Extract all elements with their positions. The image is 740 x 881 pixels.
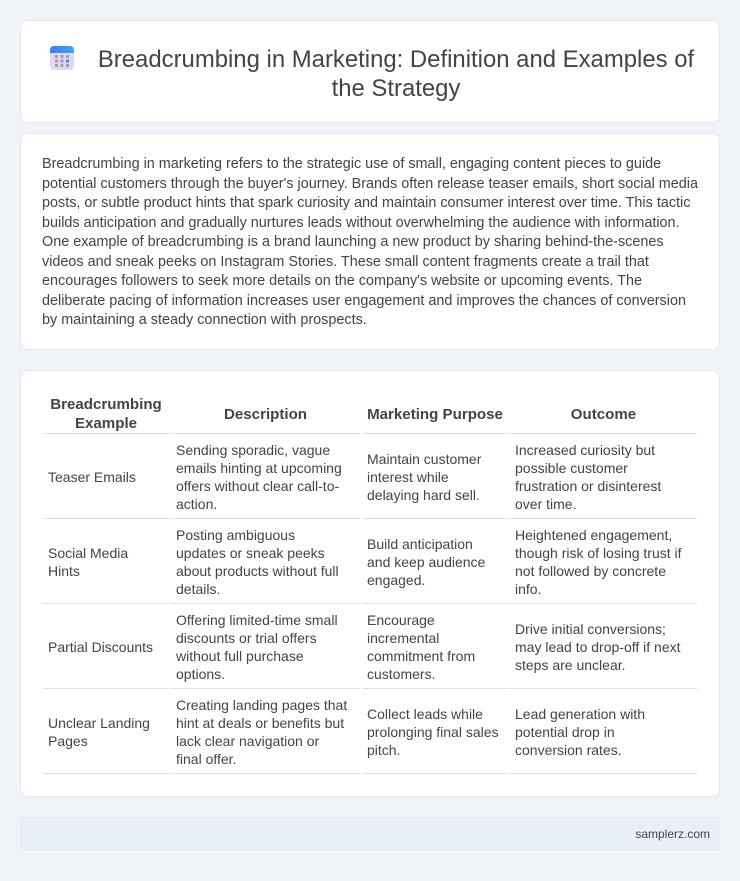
table: breadcrumbing examples: lack clear navigation or (176, 733, 319, 749)
table: breadcrumbing examples: not followed by concrete (515, 563, 666, 579)
table: breadcrumbing examples: Offering limited-time small (176, 612, 338, 628)
table: breadcrumbing examples: Marketing Purpose (367, 406, 503, 422)
panel: table card (20, 370, 720, 797)
table: breadcrumbing examples: and keep audience (367, 554, 485, 570)
table: breadcrumbing examples: incremental (367, 630, 439, 646)
table: breadcrumbing examples: Heightened engagement, (515, 527, 672, 543)
text block: introduction: deliberate pacing of information increases user engagement and improves the chances of conversion (42, 292, 686, 308)
table: breadcrumbing examples: without full purchase (176, 648, 304, 664)
table: breadcrumbing examples: Description (224, 406, 307, 422)
footer (20, 817, 720, 851)
table: breadcrumbing examples: details. (176, 581, 220, 597)
table: breadcrumbing examples: may lead to drop-off if next (515, 639, 680, 655)
table: breadcrumbing examples: offers without clear call-to- (176, 478, 339, 494)
panel: title card (20, 20, 720, 123)
text block: introduction: potential customers through the buyer's journey. Brands often release teaser emails, short social media (42, 176, 698, 192)
table: breadcrumbing examples: engaged. (367, 572, 425, 588)
table: breadcrumbing examples: commitment from (367, 648, 475, 664)
table: breadcrumbing examples: over time. (515, 496, 576, 512)
text block: introduction: videos and sneak peeks on Instagram Stories. These small content fragments create a trail that (42, 254, 649, 270)
text block: introduction: by maintaining a steady connection with prospects. (42, 312, 367, 328)
table: breadcrumbing examples: Encourage (367, 612, 435, 628)
title: Breadcrumbing in Marketing: Definition and Examples of (98, 46, 694, 73)
table: breadcrumbing examples: Outcome (571, 406, 636, 422)
text block: introduction: builds anticipation and gradually nurtures leads without overwhelming the audience with information. (42, 214, 680, 230)
table: breadcrumbing examples: Increased curiosity but (515, 442, 655, 458)
table: breadcrumbing examples: steps are unclear. (515, 657, 626, 673)
table: breadcrumbing examples: Creating landing pages that (176, 697, 347, 713)
table: breadcrumbing examples: Example (75, 415, 137, 432)
table: breadcrumbing examples: info. (515, 581, 541, 597)
table: breadcrumbing examples: Maintain customer (367, 451, 481, 467)
table: breadcrumbing examples: hint at deals or benefits but (176, 715, 344, 731)
table: breadcrumbing examples: action. (176, 496, 217, 512)
table: breadcrumbing examples: Pages (48, 733, 88, 749)
table: breadcrumbing examples: conversion rates. (515, 742, 622, 758)
table: breadcrumbing examples: Hints (48, 563, 80, 579)
table: breadcrumbing examples: though risk of losing trust if (515, 545, 682, 561)
table: breadcrumbing examples: updates or sneak peeks (176, 545, 325, 561)
table: breadcrumbing examples: customers. (367, 666, 435, 682)
table: breadcrumbing examples: Build anticipation (367, 536, 473, 552)
panel: intro card (20, 133, 720, 350)
table: breadcrumbing examples: Unclear Landing (48, 715, 150, 731)
table: breadcrumbing examples: options. (176, 666, 225, 682)
table: breadcrumbing examples: Sending sporadic, vague (176, 442, 330, 458)
title: the Strategy (332, 75, 460, 102)
table: breadcrumbing examples: pitch. (367, 742, 400, 758)
table: breadcrumbing examples: final offer. (176, 751, 236, 767)
table: breadcrumbing examples: Social Media (48, 545, 128, 561)
table: breadcrumbing examples: Partial Discounts (48, 639, 153, 655)
table: breadcrumbing examples: possible customer (515, 460, 628, 476)
table: breadcrumbing examples: frustration or disinterest (515, 478, 661, 494)
table: breadcrumbing examples (43, 396, 697, 774)
table: breadcrumbing examples: Posting ambiguous (176, 527, 295, 543)
table: breadcrumbing examples: Breadcrumbing (50, 396, 162, 413)
footer: samplerz.com (635, 827, 710, 841)
title (98, 46, 694, 102)
text block: introduction: posts, or subtle product hints that spark curiosity and maintain consumer interest over time. This tactic (42, 195, 690, 211)
text block: introduction: One example of breadcrumbing is a brand launching a new product by sharing behind-the-scenes (42, 234, 664, 250)
table: breadcrumbing examples: Teaser Emails (48, 469, 136, 485)
table: breadcrumbing examples: Drive initial conversions; (515, 621, 666, 637)
table: breadcrumbing examples: interest while (367, 469, 449, 485)
table: breadcrumbing examples: emails hinting at upcoming (176, 460, 342, 476)
table: breadcrumbing examples: about products without full (176, 563, 339, 579)
table: breadcrumbing examples: prolonging final sales (367, 724, 499, 740)
text block: introduction: Breadcrumbing in marketing refers to the strategic use of small, engaging content pieces to guide (42, 156, 661, 172)
table: breadcrumbing examples: potential drop in (515, 724, 615, 740)
text block: introduction: encourages followers to seek more details on the company's website or upcoming events. The (42, 273, 642, 289)
table: breadcrumbing examples: discounts or trial offers (176, 630, 317, 646)
table: breadcrumbing examples: Collect leads while (367, 706, 483, 722)
table: breadcrumbing examples: Lead generation with (515, 706, 645, 722)
text block: introduction (42, 156, 698, 328)
icon: calendar (50, 46, 74, 70)
table: breadcrumbing examples: delaying hard sell. (367, 487, 480, 503)
